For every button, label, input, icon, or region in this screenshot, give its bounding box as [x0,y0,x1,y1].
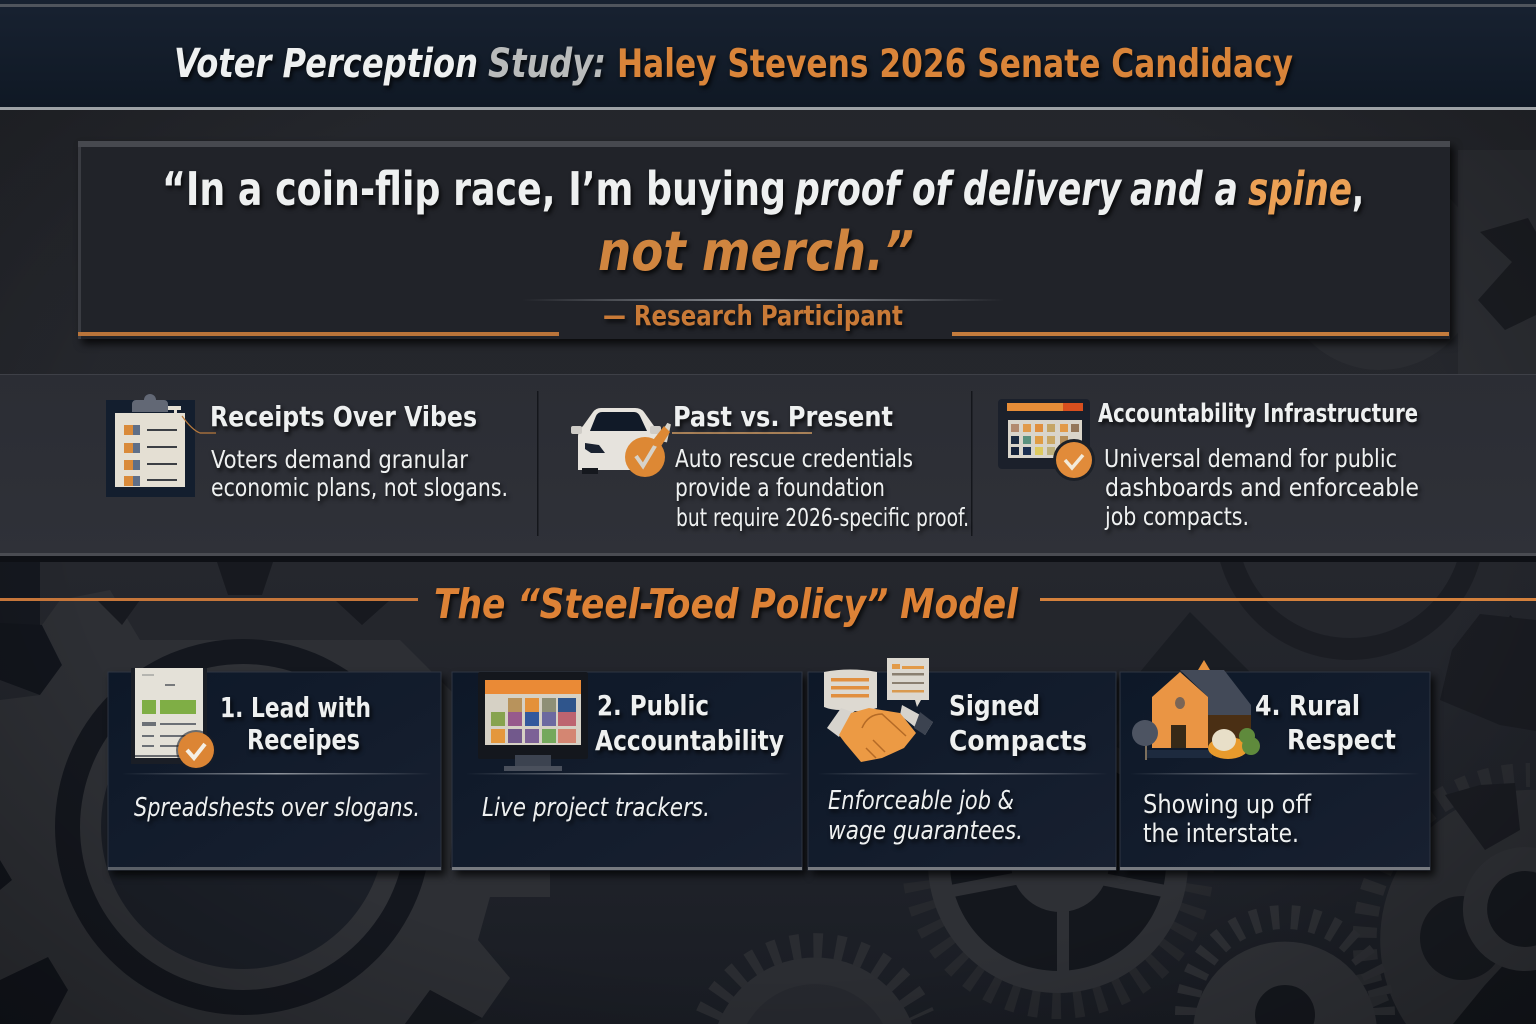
icon: clipboard [106,394,216,497]
card 4 text: 4. Rural [1255,689,1360,722]
card 1 text: Spreadshests over slogans. [134,793,420,823]
card 4 text: the interstate. [1143,819,1299,849]
title [174,41,1293,87]
card 3 text: wage guarantees. [828,816,1023,846]
finding: past vs present: Auto rescue credentials [675,444,913,473]
finding: receipts over vibes: Voters demand granular [211,445,469,474]
icon: document with check [131,668,216,770]
finding: accountability infrastructure: Universal demand for public [1104,444,1397,473]
card 2 text: Live project trackers. [482,793,710,823]
quote text: , [1352,162,1364,216]
finding: accountability infrastructure: dashboards and enforceable [1105,473,1419,502]
header banner [0,0,1536,110]
card 4 text: Showing up off [1143,790,1312,820]
gear: bottom right toothed [1187,917,1383,1024]
quote text [162,162,1364,283]
quote text: “In a coin-flip race, I’m buying [162,162,786,216]
card 4 text: Respect [1287,723,1396,756]
card 4 text [1143,689,1396,849]
quote text: spine [1248,162,1352,216]
panel: card 1 lead with receipts [108,668,441,870]
gear: upper shapes [1140,150,1536,731]
finding: accountability infrastructure: Accountability Infrastructure [1098,399,1418,429]
section heading: steel-toed policy model: The “Steel-Toed Policy” Model [434,580,1019,628]
card 1 text: Receipes [247,723,360,756]
card 1 text: 1. Lead with [220,691,371,724]
icon: dashboard calendar with check [998,399,1095,481]
card 2 text: Accountability [595,724,784,757]
panel: card 2 public accountability [452,672,802,870]
icon: handshake with speech bubbles [824,658,933,762]
card 2 text: 2. Public [597,689,709,722]
finding: past vs present: provide a foundation [675,473,885,502]
rule under past vs present [672,432,812,434]
panel: quote [78,141,1450,339]
attribution: — Research Participant [603,299,903,332]
card 3 text: Compacts [949,724,1087,757]
finding: receipts over vibes: economic plans, not slogans. [211,473,508,502]
panel: key findings strip [0,374,1536,556]
panel: card 3 signed compacts [808,658,1116,870]
section heading: steel-toed policy model [0,580,1536,628]
card 3 text [828,689,1087,846]
quote text: proof of delivery [794,162,1123,216]
gear: bottom small toothed [709,947,921,1024]
card 2 text [482,689,784,823]
gear: far right [1365,775,1536,1024]
icon: monitor dashboard [478,672,588,771]
finding: past vs present [673,400,969,532]
finding: accountability infrastructure [1098,399,1419,531]
quote text: and a [1130,162,1238,216]
card 1 text [134,691,420,823]
card 3 text: Enforceable job & [828,786,1014,816]
gear: bottom centre spoked [916,721,1200,1005]
finding: past vs present: but require 2026-specific proof. [676,503,969,532]
title: Voter Perception [174,41,478,87]
title: Haley Stevens 2026 Senate Candidacy [617,42,1293,87]
title: Study: [488,41,606,87]
panel: card 4 rural respect [1120,660,1430,870]
card 3 text: Signed [949,689,1040,722]
quote text: not merch.” [598,220,914,283]
finding: accountability infrastructure: job compacts. [1104,502,1249,531]
icon: car with check [571,408,670,477]
finding: receipts over vibes: Receipts Over Vibes [210,400,477,433]
finding: past vs present: Past vs. Present [673,400,893,433]
finding: receipts over vibes [210,400,508,502]
icon: rural house [1132,660,1260,760]
gear: large left [0,556,550,1024]
